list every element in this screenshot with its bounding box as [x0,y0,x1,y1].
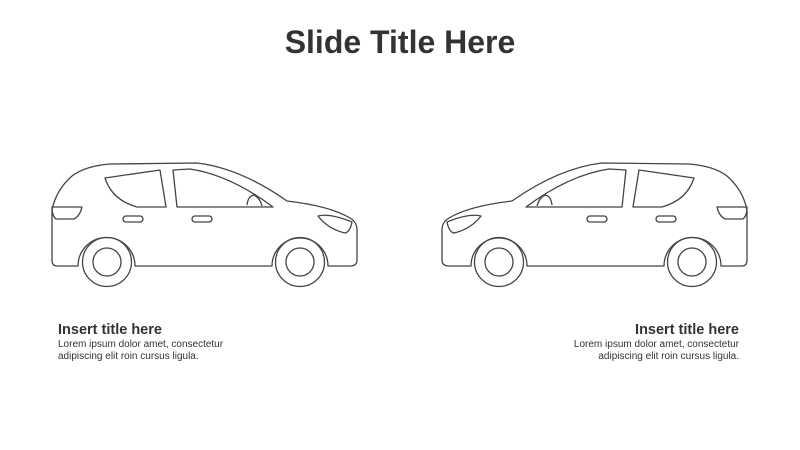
car: right [442,163,747,286]
title: Slide Title Here [285,24,515,60]
car: left [52,163,357,286]
text block: left: Insert title here [58,322,162,338]
text block: left [58,322,223,362]
text block: right: Lorem ipsum dolor amet, consectetur [574,339,739,350]
text block: right: adipiscing elit roin cursus ligula. [598,351,739,362]
text block: right: Insert title here [635,322,739,338]
text block: left: Lorem ipsum dolor amet, consectetur [58,339,223,350]
text block: right [574,322,739,362]
text block: left: adipiscing elit roin cursus ligula. [58,351,199,362]
